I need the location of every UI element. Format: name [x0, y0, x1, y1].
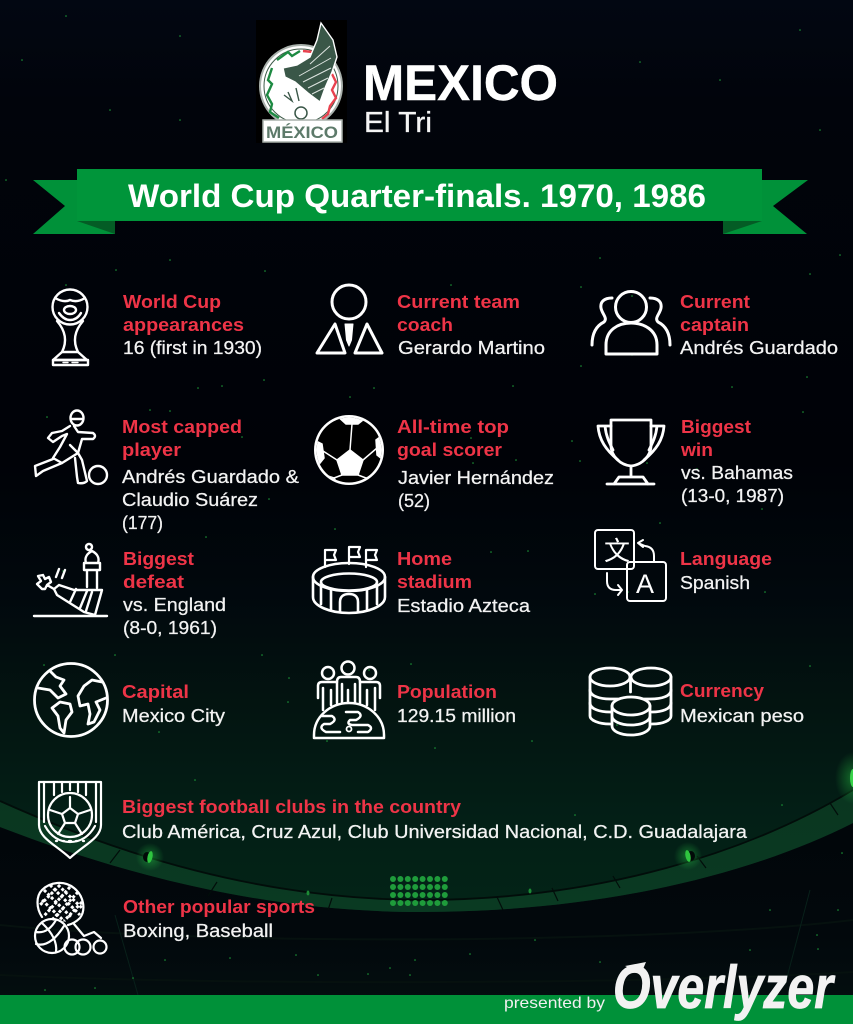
stat: current team coach: Current team [397, 292, 520, 312]
icon: other sports balls [35, 883, 106, 954]
subtitle: El Tri: El Tri [364, 107, 432, 139]
icon: world cup trophy [52, 290, 88, 365]
stat: most capped player: (177) [122, 513, 163, 533]
stat: other popular sports: Boxing, Baseball [123, 921, 273, 941]
banner heading: World Cup Quarter-finals. 1970, 1986 [128, 178, 706, 214]
stat: population: 129.15 million [397, 706, 516, 726]
stat: biggest win: (13-0, 1987) [681, 486, 784, 506]
icon: translate language [595, 530, 666, 601]
stat: biggest win: win [680, 440, 713, 460]
stat: other popular sports: Other popular sports [123, 897, 315, 917]
stat: biggest football clubs: Club América, Cruz Azul, Club Universidad Nacional, C.D. Guadalajara [122, 822, 748, 842]
stat: biggest defeat: (8-0, 1961) [123, 618, 217, 638]
stat: biggest win [680, 417, 793, 506]
stat: biggest football clubs [122, 797, 748, 842]
stat: current captain: captain [680, 315, 749, 335]
stat: currency: Currency [680, 681, 764, 701]
stat: home stadium [397, 549, 531, 616]
icon: population on globe [314, 662, 384, 738]
stat: biggest defeat: vs. England [123, 595, 226, 615]
footer text: presented by: presented by [504, 995, 605, 1012]
title: MEXICO: MEXICO [363, 55, 558, 111]
icon: fallen chess king [34, 544, 107, 616]
stat: capital: Mexico City [122, 706, 225, 726]
ribbon banner [33, 169, 808, 234]
stat: biggest win: vs. Bahamas [681, 463, 793, 483]
stat: capital: Capital [122, 682, 189, 702]
stat: capital [122, 682, 225, 726]
stat: currency [680, 681, 804, 726]
stat: biggest win: Biggest [681, 417, 751, 437]
stat: current captain [680, 292, 838, 358]
icon: club shield [39, 782, 101, 858]
stat: language: Spanish [680, 573, 750, 593]
stat: most capped player: Claudio Suárez [122, 490, 258, 510]
stat: most capped player: Most capped [122, 417, 242, 437]
icon: globe [34, 664, 108, 736]
stat: most capped player: Andrés Guardado & [122, 467, 299, 487]
stat: language [680, 549, 772, 593]
stat: World Cup appearances: 16 (first in 1930) [123, 338, 262, 358]
stat: population: Population [397, 682, 497, 702]
logo: Mexico crest [256, 20, 347, 143]
stat: World Cup appearances [123, 292, 262, 358]
logo: Mexico crest: MÉXICO [266, 123, 338, 142]
stat: biggest defeat: Biggest [123, 549, 194, 569]
stat: top goal scorer: Javier Hernández [398, 468, 554, 488]
stat: biggest defeat [123, 549, 226, 638]
stat: current captain: Andrés Guardado [680, 338, 838, 358]
footer bar [0, 995, 853, 1024]
stat: biggest defeat: defeat [123, 572, 184, 592]
stat: current team coach: coach [397, 315, 453, 335]
icon: translate language: A [636, 569, 654, 599]
stat: top goal scorer: (52) [398, 491, 430, 511]
icon: stadium [313, 547, 385, 613]
stat: most capped player: player [122, 440, 181, 460]
stat: home stadium: Estadio Azteca [397, 596, 531, 616]
icon: player kicking ball [35, 410, 107, 484]
icon: coin stacks [590, 668, 671, 735]
stat: most capped player [122, 417, 299, 533]
stat: top goal scorer [397, 417, 554, 511]
icon: translate language: 文 [604, 536, 630, 566]
stat: current team coach [397, 292, 545, 358]
stat: home stadium: stadium [397, 572, 472, 592]
stat: language: Language [680, 549, 772, 569]
stat: top goal scorer: All-time top [397, 417, 509, 437]
icon: captain group [592, 292, 670, 354]
scoreboard dots [390, 876, 448, 906]
icon: trophy cup [598, 420, 664, 484]
stat: World Cup appearances: World Cup [123, 292, 221, 312]
stat: population [397, 682, 516, 726]
stat: current captain: Current [680, 292, 750, 312]
stat: current team coach: Gerardo Martino [398, 338, 545, 358]
stat: World Cup appearances: appearances [123, 315, 244, 335]
icon: soccer ball [314, 415, 384, 485]
stat: other popular sports [123, 897, 315, 941]
icon: coach [317, 285, 382, 353]
stat: currency: Mexican peso [680, 706, 804, 726]
stat: top goal scorer: goal scorer [397, 440, 502, 460]
stat: biggest football clubs: Biggest football clubs in the country [122, 797, 461, 817]
stat: home stadium: Home [397, 549, 452, 569]
